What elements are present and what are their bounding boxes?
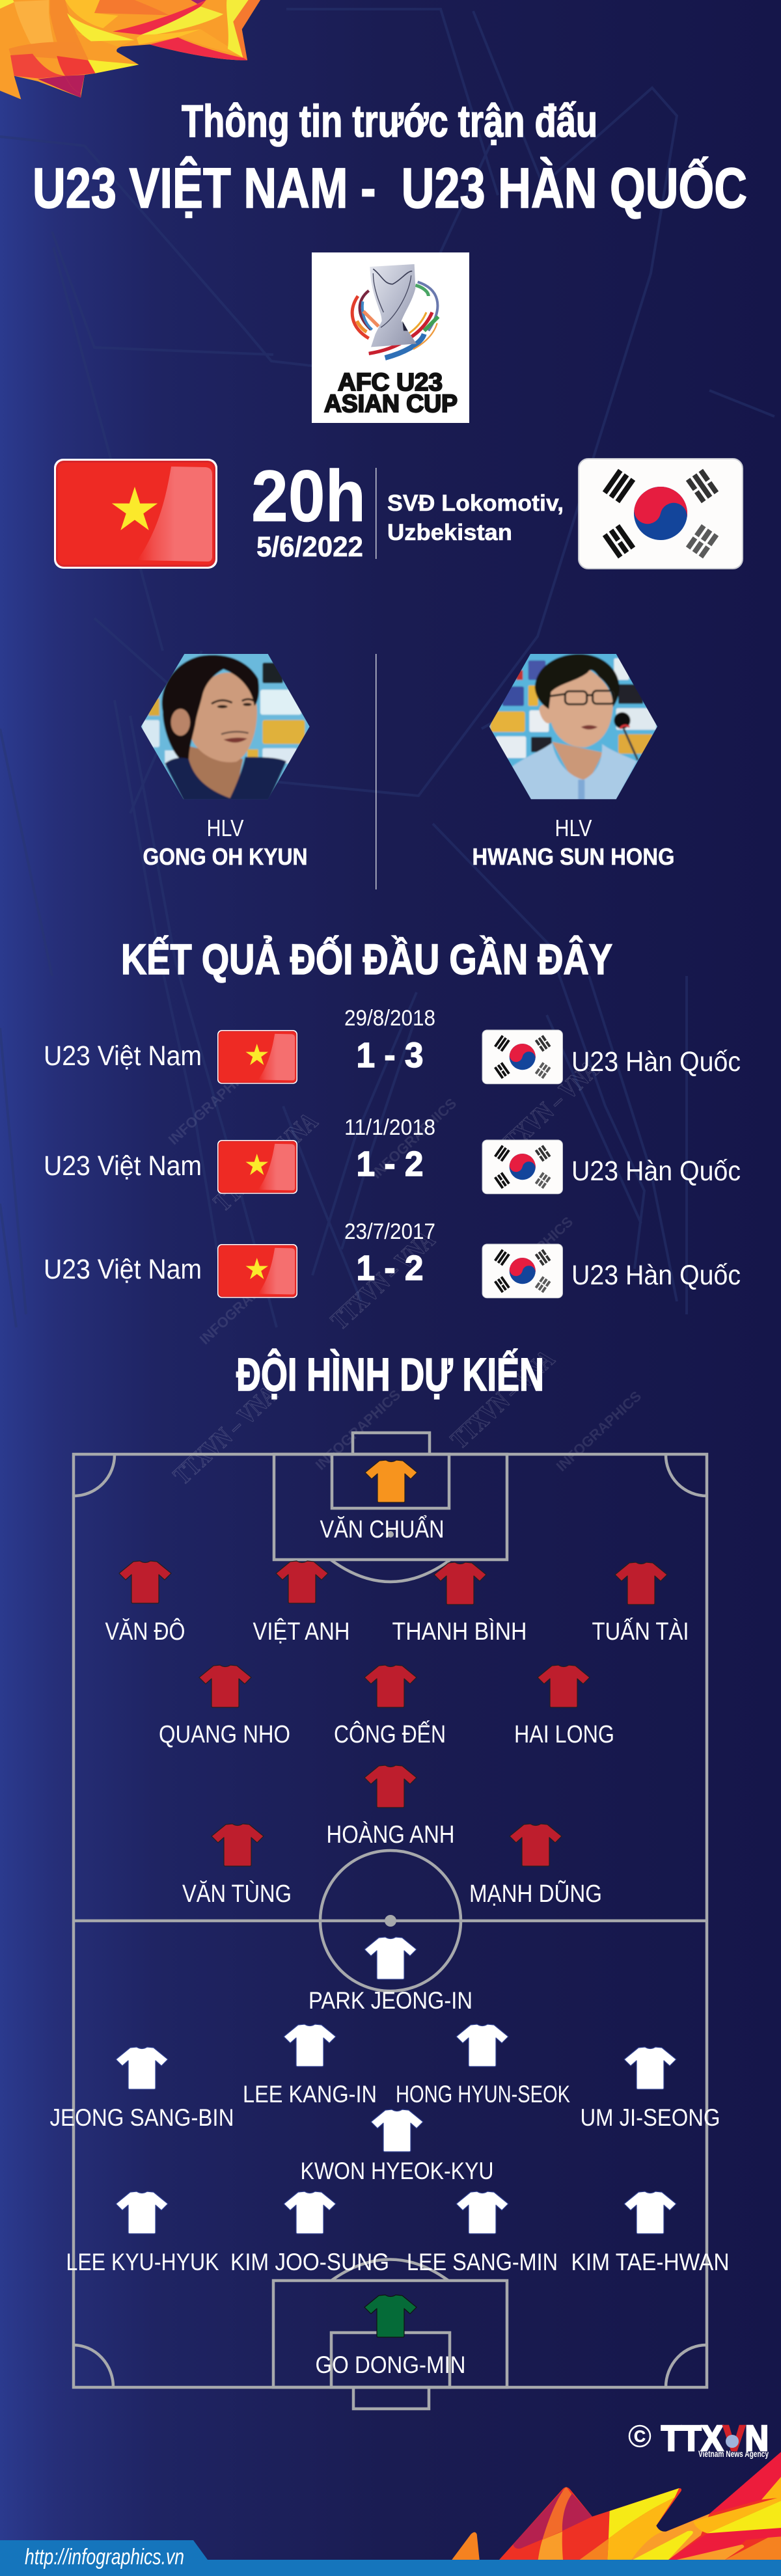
AFC U23 Asian Cup logo: ASIAN CUP (324, 390, 458, 418)
player: Lee Sang-min: LEE SANG-MIN (407, 2249, 558, 2275)
player: Văn Đô (105, 1561, 185, 1646)
player: Kim Tae-hwan (571, 2191, 729, 2275)
player: Go Dong-min (315, 2295, 466, 2378)
player: Hai Long: HAI LONG (514, 1721, 614, 1748)
match row: 23/7/2017: 1 - 2 (357, 1249, 423, 1288)
flag: South Korea large (579, 459, 743, 569)
match row: 23/7/2017 (44, 1219, 741, 1298)
player: Hai Long (514, 1665, 614, 1748)
player: Việt Anh (253, 1561, 350, 1646)
bottom flame decoration (443, 2451, 781, 2562)
player: Jeong Sang-bin (49, 2047, 234, 2131)
player: Park Jeong-in: PARK JEONG-IN (308, 1987, 473, 2014)
match row: 23/7/2017: U23 Việt Nam (44, 1254, 202, 1285)
coach label: Hwang Sun Hong: HWANG SUN HONG (473, 843, 674, 870)
coach photo: Gong Oh Kyun (141, 654, 310, 799)
player: Kim Tae-hwan: KIM TAE-HWAN (571, 2249, 729, 2275)
footer band (0, 2540, 781, 2576)
player: Việt Anh: VIỆT ANH (253, 1618, 350, 1646)
player: Văn Tùng (182, 1824, 292, 1908)
coach label: Gong Oh Kyun: GONG OH KYUN (143, 843, 307, 870)
player: Văn Đô: VĂN ĐÔ (105, 1617, 185, 1646)
heading: predicted lineups: ĐỘI HÌNH DỰ KIẾN (236, 1349, 544, 1401)
watermarks: TTXVN – VNA (445, 1344, 560, 1454)
player: Công Đến (334, 1665, 446, 1748)
player: Mạnh Dũng (469, 1824, 602, 1908)
player: Kim Joo-sung: KIM JOO-SUNG (230, 2249, 389, 2275)
player: Um Ji-seong: UM JI-SEONG (581, 2104, 720, 2131)
watermarks: TTXVN – VNA (489, 1054, 604, 1165)
player: Lee Kyu-hyuk: LEE KYU-HYUK (66, 2249, 219, 2275)
player: Văn Chuẩn: VĂN CHUẨN (320, 1514, 444, 1543)
player: Kim Joo-sung (230, 2191, 389, 2275)
match row: 29/8/2018: U23 Hàn Quốc (571, 1046, 741, 1078)
player: Thanh Bình: THANH BÌNH (392, 1618, 527, 1646)
player: Lee Kyu-hyuk (66, 2191, 219, 2275)
copyright TTXVN logo: C (634, 2428, 646, 2446)
venue: SVĐ Lokomotiv, (387, 491, 564, 516)
match row: 11/1/2018 (44, 1115, 741, 1194)
watermarks: INFOGRAPHICS (165, 1061, 256, 1148)
match row: 29/8/2018: 1 - 3 (357, 1036, 423, 1075)
coach label: Gong Oh Kyun (143, 815, 307, 870)
venue: Uzbekistan (387, 520, 512, 545)
watermarks: INFOGRAPHICS (368, 1095, 459, 1182)
player: Um Ji-seong (581, 2047, 720, 2131)
player: Hong Hyun-seok: HONG HYUN-SEOK (396, 2081, 570, 2108)
watermarks: INFOGRAPHICS (312, 1387, 404, 1473)
coach label: Hwang Sun Hong (473, 815, 674, 870)
player: Lee Kang-in (243, 2024, 377, 2108)
match time: 20h (251, 455, 366, 537)
watermarks: INFOGRAPHICS (485, 1213, 576, 1300)
player: Hoàng Anh (327, 1765, 454, 1849)
player: Văn Tùng: VĂN TÙNG (182, 1880, 292, 1908)
flag: Vietnam large (54, 459, 217, 569)
player: Lee Kang-in: LEE KANG-IN (243, 2081, 377, 2108)
watermarks (165, 1054, 644, 1490)
footer url: http://infographics.vn (25, 2545, 184, 2569)
coach label: Gong Oh Kyun: HLV (207, 815, 243, 841)
watermarks: TTXVN – VNA (208, 1106, 323, 1217)
venue (387, 491, 564, 545)
player: Park Jeong-in (308, 1937, 473, 2014)
watermarks: INFOGRAPHICS (197, 1261, 288, 1348)
player: Hoàng Anh: HOÀNG ANH (327, 1821, 454, 1849)
AFC U23 Asian Cup logo (312, 252, 469, 423)
match date: 5/6/2022 (256, 531, 363, 563)
top flame decoration (0, 0, 260, 100)
coach photo: Hwang Sun Hong (489, 654, 657, 799)
player: Lee Sang-min (407, 2191, 558, 2275)
player: Kwon Hyeok-kyu: KWON HYEOK-KYU (301, 2158, 493, 2184)
watermarks: TTXVN – VNA (325, 1225, 440, 1335)
match row: 29/8/2018 (44, 1006, 741, 1084)
player: Quang Nho: QUANG NHO (159, 1721, 290, 1748)
AFC U23 Asian Cup logo: AFC U23 (338, 369, 443, 396)
copyright TTXVN logo: TTXVN (661, 2418, 769, 2458)
match row: 23/7/2017: 23/7/2017 (344, 1219, 435, 1244)
player: Kwon Hyeok-kyu (301, 2109, 493, 2184)
match row: 11/1/2018: U23 Hàn Quốc (571, 1156, 741, 1187)
heading: recent results: KẾT QUẢ ĐỐI ĐẦU GẦN ĐÂY (121, 935, 612, 983)
player: Tuấn Tài (592, 1562, 689, 1646)
watermarks: INFOGRAPHICS (553, 1388, 644, 1474)
coach label: Hwang Sun Hong: HLV (555, 815, 592, 841)
match row: 29/8/2018: U23 Việt Nam (44, 1040, 202, 1072)
match row: 23/7/2017: U23 Hàn Quốc (571, 1260, 741, 1291)
football pitch (74, 1433, 707, 2409)
match row: 11/1/2018: 11/1/2018 (344, 1115, 435, 1140)
match row: 29/8/2018: 29/8/2018 (344, 1006, 435, 1031)
player: Go Dong-min: GO DONG-MIN (315, 2352, 466, 2378)
match row: 11/1/2018: 1 - 2 (357, 1145, 423, 1184)
match row: 11/1/2018: U23 Việt Nam (44, 1150, 202, 1182)
player: Hong Hyun-seok (396, 2024, 570, 2108)
player: Công Đến: CÔNG ĐẾN (334, 1720, 446, 1748)
player: Mạnh Dũng: MẠNH DŨNG (469, 1879, 602, 1908)
watermarks: TTXVN – VNA (167, 1379, 282, 1490)
player: Quang Nho (159, 1665, 290, 1748)
player: Thanh Bình (392, 1562, 527, 1646)
title line 1: Thông tin trước trận đấu (182, 96, 597, 146)
player: Văn Chuẩn (320, 1460, 444, 1543)
player: Jeong Sang-bin: JEONG SANG-BIN (49, 2104, 234, 2131)
player: Tuấn Tài: TUẤN TÀI (592, 1617, 689, 1646)
